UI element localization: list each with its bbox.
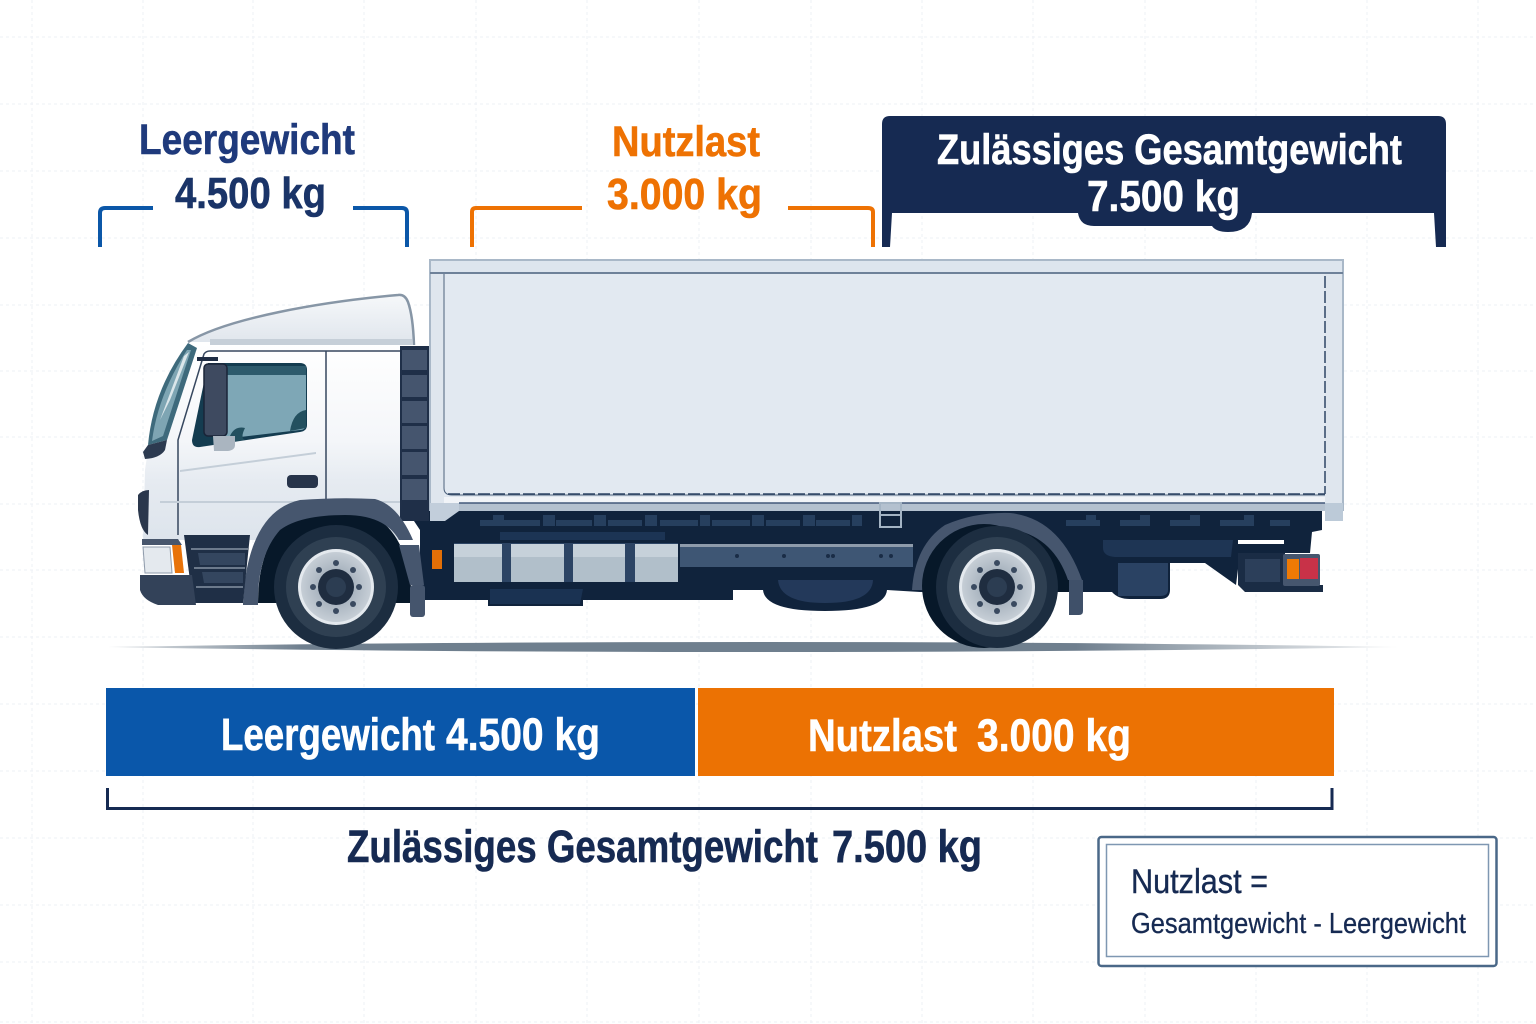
wheel arch opening [258, 505, 412, 603]
chassis [400, 500, 1322, 611]
fuel tanks [454, 543, 678, 582]
cab [138, 295, 425, 617]
weight bar: Leergewicht: Leergewicht [221, 709, 435, 760]
ground shadow [108, 642, 1398, 652]
weight bar: Leergewicht [106, 688, 695, 776]
windshield [148, 343, 197, 445]
door handle [287, 475, 318, 488]
weight bar: Leergewicht: 4.500 kg [446, 709, 600, 760]
weight bar: Nutzlast: 3.000 kg [977, 710, 1131, 761]
label: Nutzlast [607, 118, 762, 219]
bracket: Leergewicht [100, 208, 407, 247]
label: Leergewicht [139, 116, 355, 218]
chassis rail details [480, 515, 1290, 526]
rear wheel [922, 524, 1058, 648]
rear light assembly [1238, 540, 1323, 592]
side beam [680, 544, 913, 567]
bracket: Nutzlast [472, 208, 873, 247]
panel: Zulässiges Gesamtgewicht: Zulässiges Gesamtgewicht [937, 126, 1402, 174]
weight bar: Nutzlast [698, 688, 1334, 776]
cab body [143, 342, 400, 540]
formula box: Gesamtgewicht - Leergewicht [1131, 908, 1466, 940]
label: Nutzlast: 3.000 kg [607, 170, 762, 219]
bumper [140, 575, 196, 605]
side window [192, 363, 307, 447]
orange indicator [172, 545, 184, 573]
label: Nutzlast: Nutzlast [612, 118, 760, 166]
total label: Zulässiges Gesamtgewicht [347, 821, 818, 872]
total bracket [108, 788, 1332, 808]
front vent [138, 490, 149, 535]
fender [243, 498, 413, 605]
cab back panel [400, 346, 429, 521]
front wheel [274, 525, 398, 649]
total label: 7.500 kg [832, 821, 982, 872]
mirror [197, 357, 235, 451]
weight bar: Nutzlast: Nutzlast [808, 710, 957, 761]
rear fender [912, 513, 1082, 590]
formula box: Nutzlast = [1131, 863, 1268, 901]
orange side marker [432, 550, 442, 569]
panel: Zulässiges Gesamtgewicht [882, 116, 1446, 247]
wiper arm [143, 440, 167, 459]
door lines [178, 351, 400, 535]
cargo box [430, 260, 1343, 527]
rear wheel arch opening [925, 522, 1072, 592]
truck [138, 260, 1343, 649]
headlight [142, 539, 182, 545]
label: Leergewicht: 4.500 kg [175, 169, 326, 218]
grille [184, 535, 250, 603]
roof fairing [190, 295, 414, 345]
label: Leergewicht: Leergewicht [139, 116, 355, 164]
formula box [1098, 837, 1496, 966]
panel: Zulässiges Gesamtgewicht: 7.500 kg [1087, 172, 1240, 221]
rear mudflap [1069, 580, 1083, 615]
